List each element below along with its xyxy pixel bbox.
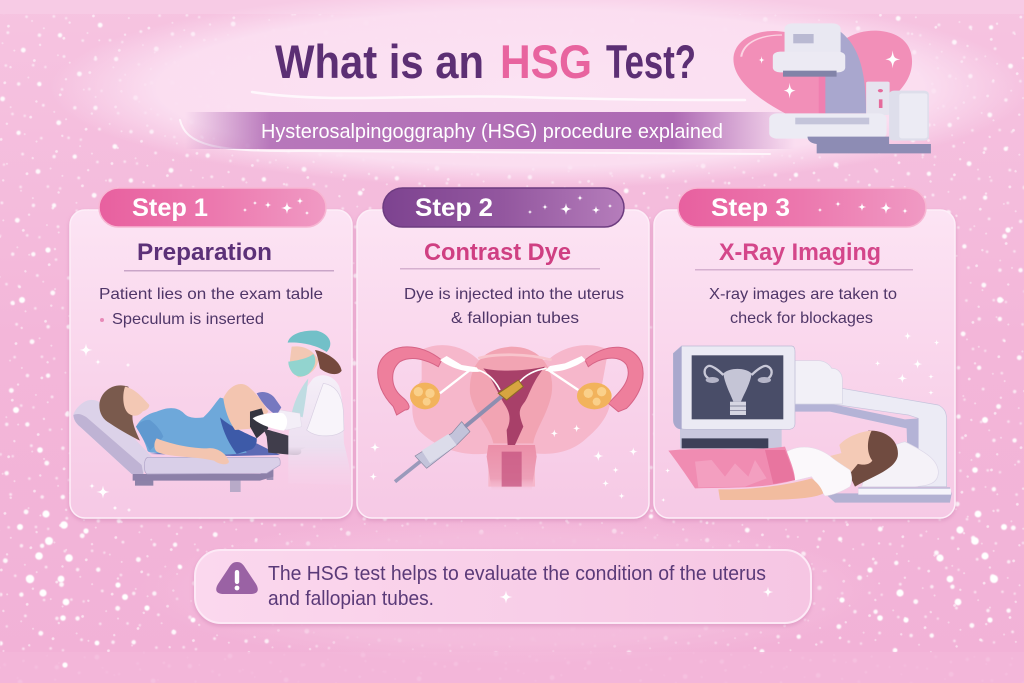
icon: heart and X-ray machine [733,23,931,153]
text: summary: The HSG test helps to evaluate the condition of the uterus [268,562,766,585]
text: preparation steps: Speculum is inserted [112,311,264,328]
panel: step 3 x-ray imaging [654,188,955,518]
step 2 pill [383,188,624,227]
panel: step 2 contrast dye [357,188,649,518]
illustration: patient under x-ray with monitor [661,332,952,503]
text: contrast dye description: Dye is injected into the uterus [404,286,624,303]
icon: warning triangle [216,562,258,594]
subtitle banner [180,92,795,154]
text: x-ray description [709,286,897,327]
step 1 pill: Step 1 [132,194,208,222]
panel card 2 [357,210,649,518]
heading: x-ray imaging: X-Ray Imaging [719,239,881,266]
sparkles [79,343,130,512]
callout: summary note [195,550,811,623]
heading: preparation: Preparation [137,239,272,266]
title: What is an [275,35,484,88]
text: preparation steps [99,286,323,328]
text: contrast dye description: & fallopian tubes [451,310,579,327]
illustration: patient on exam table with doctor [73,331,352,492]
step 2 pill: Step 2 [415,194,493,222]
text: summary [268,562,766,610]
text: contrast dye description [404,286,624,327]
text: summary: and fallopian tubes. [268,587,434,610]
illustration: uterus with catheter [369,345,643,499]
title [275,35,696,88]
title: Test? [606,35,696,88]
step 1 pill [99,188,326,227]
heading: contrast dye: Contrast Dye [424,239,571,266]
panel card 1 [70,210,352,518]
panel card 3 [654,210,955,518]
panel: step 1 preparation [70,188,352,518]
step 3 pill [678,188,926,227]
subtitle banner: Hysterosalpingoggraphy (HSG) procedure explained [261,121,723,143]
text: x-ray description: check for blockages [730,310,873,327]
title: HSG [500,35,592,88]
step 3 pill: Step 3 [711,194,790,222]
text: preparation steps: Patient lies on the exam table [99,286,323,303]
text: x-ray description: X-ray images are taken to [709,286,897,303]
